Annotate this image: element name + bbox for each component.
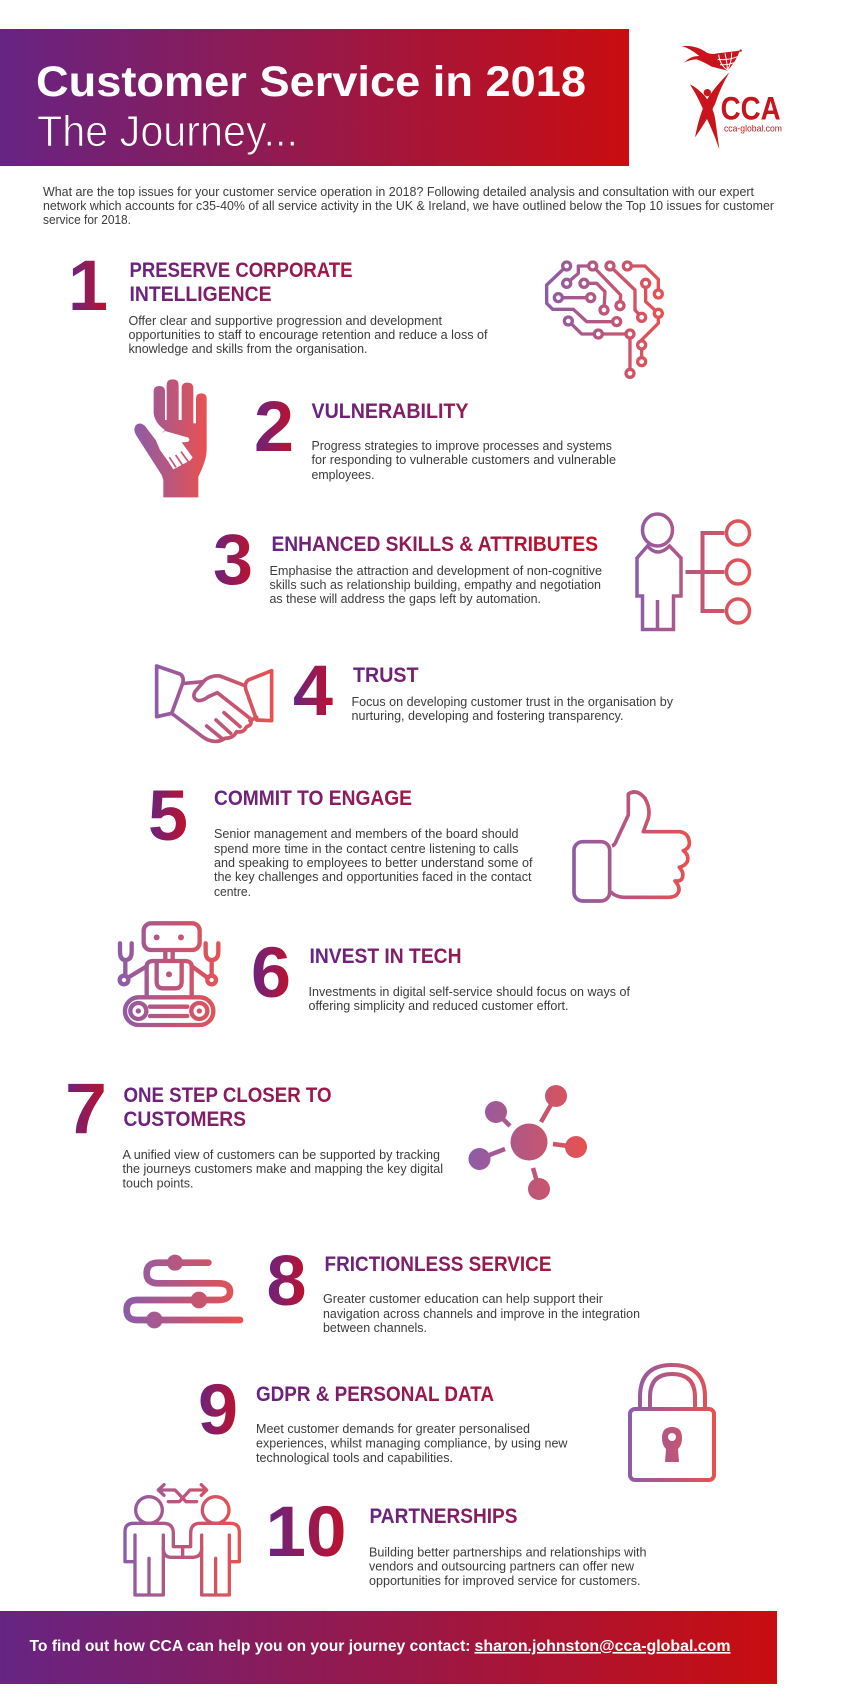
panel: issue 2 vulnerability bbox=[134, 379, 616, 497]
intro text: service for 2018. bbox=[43, 213, 131, 227]
text 6: offering simplicity and reduced customer effort. bbox=[308, 999, 568, 1013]
icon: thumbs up bbox=[574, 792, 689, 901]
footer contact text: To find out how CCA can help you on your journey contact: bbox=[30, 1638, 470, 1655]
number 5: 5 bbox=[148, 777, 188, 856]
text 2: Progress strategies to improve processes and systems bbox=[312, 439, 612, 453]
number 1: 1 bbox=[68, 247, 108, 326]
number 7: 7 bbox=[65, 1070, 107, 1149]
text 6: Investments in digital self-service should focus on ways of bbox=[308, 985, 631, 999]
panel: issue 3 enhanced skills bbox=[213, 514, 750, 630]
icon: network hub bbox=[468, 1085, 587, 1200]
panel: issue 6 invest in tech bbox=[120, 923, 631, 1025]
text 1 bbox=[128, 314, 488, 356]
number 6: 6 bbox=[251, 934, 291, 1013]
intro text bbox=[43, 185, 774, 227]
heading 7: CUSTOMERS bbox=[124, 1108, 246, 1131]
heading 6: INVEST IN TECH bbox=[310, 945, 462, 968]
text 5: spend more time in the contact centre listening to calls bbox=[214, 842, 518, 856]
heading 7: ONE STEP CLOSER TO bbox=[124, 1084, 332, 1107]
text 5: Senior management and members of the board should bbox=[214, 827, 519, 841]
text 6 bbox=[308, 985, 631, 1013]
text 8 bbox=[323, 1292, 640, 1335]
icon: helping hand bbox=[134, 379, 207, 497]
text 5: and speaking to employees to better understand some of bbox=[214, 856, 533, 870]
text 10 bbox=[369, 1546, 647, 1588]
logo: CCA: CCA bbox=[721, 89, 781, 126]
text 2 bbox=[312, 439, 616, 482]
text 8: Greater customer education can help support their bbox=[323, 1292, 603, 1306]
title banner bbox=[0, 29, 629, 166]
footer banner bbox=[0, 1611, 777, 1684]
panel: issue 5 commit to engage bbox=[148, 777, 689, 901]
text 2: employees. bbox=[312, 468, 374, 482]
icon: two partners shaking hands bbox=[125, 1485, 239, 1595]
heading 4: TRUST bbox=[353, 664, 419, 687]
heading 7 bbox=[124, 1084, 332, 1131]
text 8: navigation across channels and improve in the integration bbox=[323, 1307, 640, 1321]
text 5: the key challenges and opportunities faced in the contact bbox=[214, 870, 532, 884]
heading 1 bbox=[130, 259, 352, 306]
text 7: A unified view of customers can be supported by tracking bbox=[122, 1148, 440, 1162]
text 7: touch points. bbox=[122, 1176, 194, 1190]
text 1: opportunities to staff to encourage retention and reduce a loss of bbox=[128, 328, 488, 342]
text 9: technological tools and capabilities. bbox=[256, 1451, 453, 1465]
heading 1: INTELLIGENCE bbox=[130, 283, 272, 306]
panel: issue 9 GDPR bbox=[198, 1365, 714, 1480]
heading 1: PRESERVE CORPORATE bbox=[130, 259, 352, 282]
text 1: Offer clear and supportive progression and development bbox=[128, 314, 443, 328]
panel: issue 1 preserve corporate intelligence bbox=[68, 247, 662, 377]
subtitle: The Journey... bbox=[37, 107, 298, 156]
intro text: network which accounts for c35-40% of all service activity in the UK & Ireland, we have outlined below the Top 10 issues for customer bbox=[43, 199, 774, 213]
text 3: skills such as relationship building, empathy and negotiation bbox=[270, 578, 601, 592]
text 9: experiences, whilst managing compliance, by using new bbox=[256, 1436, 568, 1450]
icon: circuit brain bbox=[547, 262, 662, 377]
text 7: the journeys customers make and mapping the key digital bbox=[122, 1162, 443, 1176]
icon: handshake bbox=[157, 666, 272, 741]
heading 5: COMMIT TO ENGAGE bbox=[214, 787, 412, 810]
text 9: Meet customer demands for greater personalised bbox=[256, 1422, 530, 1436]
number 9: 9 bbox=[198, 1371, 238, 1450]
text 4: Focus on developing customer trust in the organisation by bbox=[352, 695, 674, 709]
heading 2: VULNERABILITY bbox=[312, 400, 468, 423]
number 10: 10 bbox=[266, 1493, 346, 1572]
footer contact text bbox=[30, 1638, 730, 1655]
number 2: 2 bbox=[254, 388, 294, 467]
heading 8: FRICTIONLESS SERVICE bbox=[324, 1253, 552, 1276]
text 10: vendors and outsourcing partners can offer new bbox=[369, 1560, 635, 1574]
text 5 bbox=[214, 827, 533, 899]
heading 10: PARTNERSHIPS bbox=[370, 1505, 518, 1528]
text 9 bbox=[256, 1422, 568, 1465]
panel: issue 10 partnerships bbox=[125, 1485, 647, 1595]
icon: winding path bbox=[127, 1255, 240, 1328]
icon: person with options bbox=[637, 514, 750, 630]
title: Customer Service in 2018 bbox=[36, 58, 586, 106]
number 8: 8 bbox=[266, 1242, 306, 1321]
logo: CCA bbox=[682, 46, 782, 149]
text 3: Emphasise the attraction and development of non-cognitive bbox=[270, 564, 602, 578]
text 1: knowledge and skills from the organisation. bbox=[128, 342, 368, 356]
footer contact text: sharon.johnston@cca-global.com bbox=[474, 1638, 730, 1655]
panel: issue 8 frictionless service bbox=[127, 1242, 640, 1335]
heading 3: ENHANCED SKILLS & ATTRIBUTES bbox=[272, 533, 598, 556]
number 4: 4 bbox=[293, 652, 334, 731]
intro text: What are the top issues for your customer service operation in 2018? Following detailed analysis and consultation with our expert bbox=[43, 185, 755, 199]
panel: issue 7 one step closer bbox=[65, 1070, 587, 1200]
text 7 bbox=[122, 1148, 443, 1190]
text 4 bbox=[352, 695, 674, 723]
text 5: centre. bbox=[214, 885, 251, 899]
text 8: between channels. bbox=[323, 1321, 427, 1335]
text 10: opportunities for improved service for customers. bbox=[369, 1574, 640, 1588]
text 10: Building better partnerships and relationships with bbox=[369, 1546, 647, 1560]
text 2: for responding to vulnerable customers and vulnerable bbox=[312, 453, 616, 467]
icon: padlock bbox=[630, 1365, 714, 1480]
text 4: nurturing, developing and fostering transparency. bbox=[352, 709, 624, 723]
text 3: as these will address the gaps left by automation. bbox=[270, 592, 541, 606]
heading 9: GDPR & PERSONAL DATA bbox=[256, 1383, 494, 1406]
logo: CCA: cca-global.com bbox=[724, 124, 782, 134]
icon: robot bbox=[120, 923, 218, 1025]
number 3: 3 bbox=[213, 521, 253, 600]
panel: issue 4 trust bbox=[157, 652, 674, 741]
text 3 bbox=[270, 564, 602, 606]
